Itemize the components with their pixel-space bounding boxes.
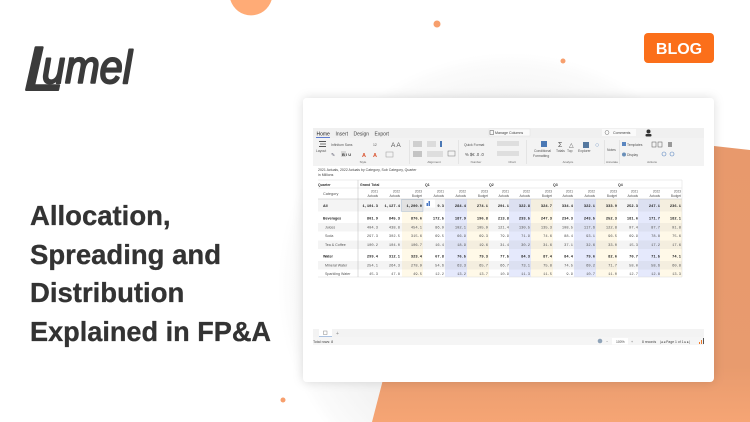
regular values: 91.8 <box>672 226 681 230</box>
ribbon group labels: Annotate <box>606 160 618 164</box>
regular values: 102.1 <box>455 226 467 230</box>
bold values: 845.3 <box>389 218 401 222</box>
regular values: 302.5 <box>389 235 400 239</box>
bold values: 77.5 <box>500 256 510 260</box>
status bar: 8 records <box>642 340 656 344</box>
ribbon controls: Infinitum Sans <box>331 143 353 147</box>
sheet tab bar <box>313 329 704 337</box>
bold values: 274.1 <box>477 205 489 209</box>
header rows: Budget <box>478 194 488 198</box>
quick action icon <box>425 200 435 208</box>
regular values: 69.3 <box>479 235 488 239</box>
row labels: Juices <box>325 226 335 230</box>
regular values: 117.6 <box>584 226 595 230</box>
regular values: 69.9 <box>629 235 638 239</box>
bold values: 322.8 <box>519 205 531 209</box>
regular values: 16.4 <box>435 244 445 248</box>
table grid lines <box>318 180 682 277</box>
row shading <box>318 200 682 270</box>
regular values: 30.2 <box>521 244 530 248</box>
regular values: 86.9 <box>435 226 444 230</box>
regular values <box>367 226 681 277</box>
regular values: 78.8 <box>651 235 660 239</box>
bold values: 252.3 <box>606 218 618 222</box>
regular values: 13.7 <box>479 273 488 277</box>
ribbon tabs <box>316 132 390 138</box>
regular values: 15.3 <box>629 244 638 248</box>
header rows: 2021 <box>371 190 378 194</box>
ribbon group labels: Actions <box>647 160 657 164</box>
regular values: 96.5 <box>608 235 617 239</box>
bold values: 801.9 <box>367 218 378 222</box>
bold values: 70.7 <box>629 256 638 260</box>
row labels: Tea & Coffee <box>325 243 346 247</box>
bold values: 87.4 <box>543 256 553 260</box>
ribbon controls: Notes <box>607 148 616 152</box>
header rows: 2022 <box>653 190 660 194</box>
table subtitle: in Millions <box>318 173 334 177</box>
row labels: Sparkling Water <box>325 272 351 276</box>
regular values: 32.6 <box>586 244 595 248</box>
bold values: 213.8 <box>498 218 510 222</box>
regular values: 105.9 <box>477 226 488 230</box>
regular values: 58.6 <box>651 264 660 268</box>
status bar <box>313 337 704 345</box>
header rows <box>318 183 681 198</box>
logo: Lumel: umel <box>42 41 134 93</box>
ribbon controls: A A <box>391 142 401 149</box>
regular values: 17.6 <box>672 244 681 248</box>
ribbon controls: Templates <box>627 143 643 147</box>
header rows: 2021 <box>437 190 444 194</box>
header rows: Actuals <box>628 194 638 198</box>
regular values: 13.3 <box>672 273 681 277</box>
ribbon controls: % $€ .0 .0 <box>465 152 485 157</box>
regular values: 9.9 <box>566 273 573 277</box>
panel: screenshot card <box>303 98 714 382</box>
bold values: 172.5 <box>433 218 445 222</box>
regular values: 315.6 <box>411 235 422 239</box>
ribbon controls: B I U <box>342 152 351 157</box>
ribbon controls: Σ <box>558 142 563 149</box>
ribbon controls: Display <box>627 153 638 157</box>
header rows: 2022 <box>523 190 530 194</box>
header rows: 2021 <box>631 190 638 194</box>
row labels: Beverages <box>323 216 341 220</box>
bold values: 234.3 <box>562 218 574 222</box>
bold values: 233.5 <box>519 218 531 222</box>
header rows: Actuals <box>563 194 573 198</box>
regular values: 278.9 <box>411 264 422 268</box>
table <box>318 180 682 277</box>
background: soft grey circle <box>278 53 750 422</box>
header rows: 2022 <box>393 190 400 194</box>
bold values: 79.3 <box>479 256 489 260</box>
ribbon controls: Layout <box>316 149 326 153</box>
status bar: Total rows: 8 <box>313 340 333 344</box>
regular values: 438.8 <box>389 226 400 230</box>
regular values: 37.1 <box>564 244 574 248</box>
regular values: 104.0 <box>389 244 400 248</box>
bold values: 76.5 <box>457 256 467 260</box>
header rows: 2023 <box>481 190 488 194</box>
regular values: 45.3 <box>369 273 378 277</box>
bold values: 247.3 <box>541 218 553 222</box>
heading: Allocation, <box>30 200 171 231</box>
row labels: Mineral Water <box>325 264 348 268</box>
decorative dot: right <box>560 58 566 64</box>
regular values: 135.3 <box>541 226 552 230</box>
user avatar icon <box>646 130 652 136</box>
status bar: + <box>631 340 633 344</box>
column highlights <box>402 199 682 277</box>
bold values: 243.5 <box>584 218 596 222</box>
header rows: 2021 <box>502 190 509 194</box>
regular values: 65.7 <box>479 264 488 268</box>
ribbon tabs: Home <box>316 132 330 138</box>
bold values: 82.6 <box>608 256 617 260</box>
heading: Spreading and <box>30 239 221 270</box>
manage columns button: Manage Columns <box>495 131 523 135</box>
bold values <box>362 205 682 260</box>
row labels: Water <box>323 254 333 258</box>
ribbon tabs: Design <box>354 132 369 138</box>
header rows: Actuals <box>650 194 660 198</box>
logo: Lumel <box>24 35 134 104</box>
header rows: Category <box>323 192 339 196</box>
bold values: 333.9 <box>606 205 617 209</box>
header rows: Q4 <box>618 183 623 187</box>
comments button <box>602 129 636 136</box>
bold values: 291.1 <box>498 205 510 209</box>
badge: BLOG <box>644 33 714 63</box>
header rows: Actuals <box>390 194 400 198</box>
ribbon controls: ✎ <box>331 152 335 158</box>
decorative circle: top <box>230 0 272 15</box>
header rows: Budget <box>607 194 617 198</box>
bold values: 1,127.4 <box>384 205 401 209</box>
regular values: 31.6 <box>543 244 552 248</box>
regular values: 11.0 <box>608 273 617 277</box>
regular values: 106.7 <box>411 244 422 248</box>
ribbon controls: Formatting <box>533 154 549 158</box>
regular values: 88.4 <box>564 235 574 239</box>
status bar: |◂ ◂ Page 1 of 1 ▸ ▸| <box>660 340 690 344</box>
ribbon group labels: Chart <box>508 160 516 164</box>
regular values: 121.4 <box>498 226 510 230</box>
badge: BLOG: BLOG <box>656 41 702 58</box>
regular values: 47.8 <box>391 273 400 277</box>
regular values: 454.1 <box>411 226 423 230</box>
bold values: 323.4 <box>411 256 423 260</box>
header rows: Actuals <box>368 194 378 198</box>
bold values: 171.7 <box>649 218 660 222</box>
regular values: 66.7 <box>500 264 509 268</box>
header rows: Budget <box>671 194 681 198</box>
ribbon group labels: Style <box>360 160 367 164</box>
bold values: 252.3 <box>627 205 639 209</box>
row labels: All <box>323 204 328 208</box>
ribbon controls: Top <box>567 149 573 153</box>
bold values: 1,101.3 <box>362 205 379 209</box>
header rows: 2023 <box>415 190 422 194</box>
ribbon group labels: Alignment <box>427 160 441 164</box>
bold values: 67.8 <box>435 256 445 260</box>
regular values: 66.9 <box>457 235 466 239</box>
regular values: 11.5 <box>543 273 552 277</box>
regular values: 254.1 <box>367 264 379 268</box>
regular values: 17.2 <box>651 244 660 248</box>
status bar: − <box>606 340 608 344</box>
regular values: 33.0 <box>608 244 617 248</box>
bold values: 299.4 <box>367 256 379 260</box>
header rows: Q2 <box>489 183 494 187</box>
header rows: 2023 <box>674 190 681 194</box>
ribbon controls: Totals <box>556 149 565 153</box>
regular values: 54.6 <box>435 264 444 268</box>
header rows: 2022 <box>588 190 595 194</box>
bold values: 322.1 <box>584 205 596 209</box>
ribbon controls: Quick Format <box>464 143 484 147</box>
bold values: 236.1 <box>670 205 682 209</box>
regular values: 18.9 <box>457 244 466 248</box>
regular values: 11.3 <box>521 273 530 277</box>
regular values: 13.2 <box>457 273 466 277</box>
bold values: 182.1 <box>670 218 682 222</box>
regular values: 63.3 <box>457 264 466 268</box>
regular values: 60.8 <box>672 264 681 268</box>
status bar: 100% <box>616 340 625 344</box>
selected cell <box>402 200 423 212</box>
ribbon controls: A <box>362 153 366 159</box>
ribbon tabs: Export <box>374 132 390 138</box>
header rows: Budget <box>412 194 422 198</box>
ribbon controls: 12 <box>373 143 377 147</box>
regular values: 100.2 <box>367 244 378 248</box>
heading: Distribution <box>30 277 184 308</box>
regular values: 93.1 <box>586 235 596 239</box>
ribbon controls: △ <box>569 143 574 149</box>
regular values: 297.3 <box>367 235 378 239</box>
regular values: 49.5 <box>413 273 422 277</box>
regular values: 130.5 <box>519 226 530 230</box>
ribbon controls: A <box>373 153 377 159</box>
header rows: Q3 <box>553 183 558 187</box>
bold values: 187.9 <box>455 218 466 222</box>
bold values: 84.3 <box>521 256 531 260</box>
ribbon controls: Conditional <box>534 149 551 153</box>
regular values: 79.9 <box>500 235 509 239</box>
bold values: 247.1 <box>649 205 661 209</box>
bold values: 334.4 <box>562 205 574 209</box>
regular values: 75.8 <box>543 264 552 268</box>
ribbon controls: ○ <box>595 142 599 149</box>
regular values: 31.4 <box>500 244 510 248</box>
row labels <box>323 204 351 276</box>
bold values: 79.6 <box>586 256 595 260</box>
decorative dot: top centre <box>434 20 440 28</box>
header rows: Actuals <box>434 194 444 198</box>
ribbon controls: Explorer <box>578 149 591 153</box>
ribbon tabs: Insert <box>336 132 349 138</box>
header rows: Budget <box>542 194 552 198</box>
regular values: 10.9 <box>500 273 509 277</box>
sheet tab bar: + <box>336 331 339 337</box>
bold values: 1,200.0 <box>406 205 422 209</box>
ribbon toolbar <box>313 128 704 166</box>
header rows: 2021 <box>566 190 573 194</box>
regular values: 108.5 <box>562 226 573 230</box>
heading <box>30 200 271 347</box>
header rows: 2023 <box>610 190 617 194</box>
decorative dot: bottom left <box>280 398 286 402</box>
bold values: 876.6 <box>411 218 422 222</box>
regular values: 12.7 <box>629 273 638 277</box>
ribbon group labels <box>360 160 657 164</box>
bold values: 324.7 <box>541 205 552 209</box>
comments button: Comments <box>613 131 631 135</box>
regular values: 71.7 <box>608 264 617 268</box>
bold values: 71.5 <box>651 256 661 260</box>
regular values: 58.0 <box>629 264 638 268</box>
ribbon group labels: Analyze <box>563 160 574 164</box>
manage columns button <box>489 129 530 136</box>
header rows: Quarter <box>318 183 331 187</box>
ribbon group labels: Number <box>471 160 481 164</box>
regular values: 12.8 <box>651 273 660 277</box>
bold values: 284.4 <box>455 205 467 209</box>
heading: Explained in FP&A <box>30 316 271 347</box>
header rows: 2023 <box>545 190 552 194</box>
header rows: Actuals <box>585 194 595 198</box>
regular values: 75.6 <box>672 235 681 239</box>
header rows: 2022 <box>459 190 466 194</box>
logo: Lumel: L <box>24 35 64 104</box>
bold values: 181.6 <box>627 218 638 222</box>
row labels: Soda <box>325 234 333 238</box>
regular values: 12.2 <box>435 273 444 277</box>
background: orange shape <box>372 146 750 422</box>
header rows: Actuals <box>520 194 530 198</box>
regular values: 97.4 <box>629 226 639 230</box>
ribbon controls <box>316 140 674 164</box>
regular values: 122.8 <box>606 226 617 230</box>
regular values: 87.7 <box>651 226 660 230</box>
regular values: 10.7 <box>586 273 595 277</box>
header rows: Actuals <box>456 194 466 198</box>
regular values: 73.1 <box>521 264 531 268</box>
header rows: Actuals <box>499 194 509 198</box>
bold values: 74.1 <box>672 256 682 260</box>
header rows: Q1 <box>425 183 430 187</box>
bold values: 84.4 <box>564 256 574 260</box>
regular values: 74.5 <box>564 264 573 268</box>
regular values: 74.6 <box>543 235 552 239</box>
regular values: 19.6 <box>479 244 488 248</box>
table subtitle <box>318 168 417 177</box>
table subtitle: 2021 Actuals, 2022 Actuals by Category, Sub Category, Quarter <box>318 168 417 172</box>
regular values: 69.5 <box>435 235 444 239</box>
regular values: 404.3 <box>367 226 378 230</box>
regular values: 69.2 <box>586 264 595 268</box>
bold values: 196.8 <box>477 218 489 222</box>
header rows: Grand Total <box>360 183 379 187</box>
regular values: 71.9 <box>521 235 530 239</box>
bold values: 9.3 <box>437 205 445 209</box>
regular values: 264.3 <box>389 264 400 268</box>
bold values: 312.1 <box>389 256 401 260</box>
